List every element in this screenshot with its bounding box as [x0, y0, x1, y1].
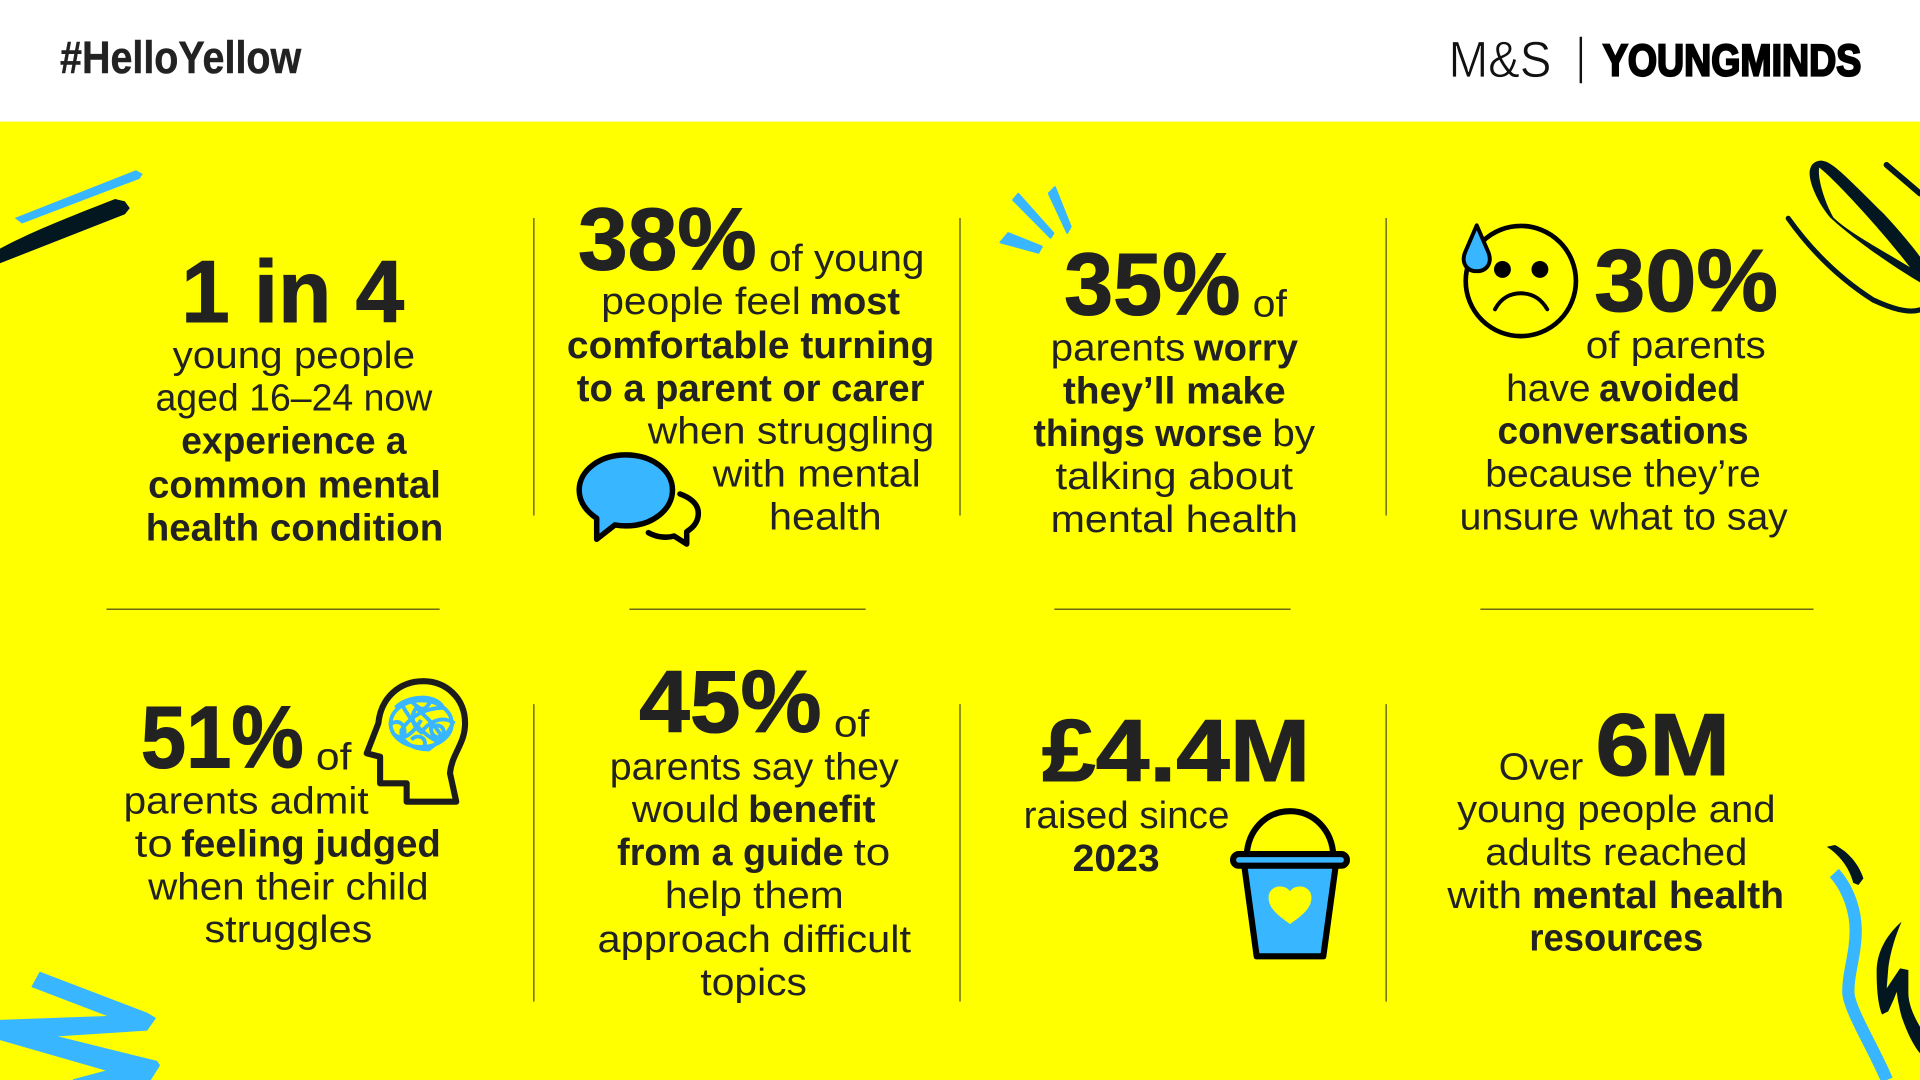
icon: head with tangled brain: [367, 681, 465, 802]
stat: 6M: young people and: [1457, 789, 1776, 831]
stat: 38%: most: [809, 281, 900, 323]
stat: 1 in 4: common mental: [148, 465, 441, 507]
stat: 38%: with mental: [712, 454, 921, 496]
stat: 45%: help them: [665, 875, 844, 917]
stat: 38%: 38%: [578, 189, 757, 288]
stat: 51%: feeling judged: [181, 823, 441, 865]
stat: 1 in 4: aged 16–24 now: [156, 378, 433, 420]
decoration: top-left strokes: [0, 170, 143, 263]
logo: YoungMinds: YOUNGMINDS: [1603, 36, 1861, 85]
stat: 51%: [124, 688, 441, 951]
stat: 45%: topics: [700, 962, 807, 1004]
stat: 6M: 6M: [1596, 695, 1730, 794]
stat: 51%: 51%: [141, 688, 304, 787]
stat: 38%: people feel: [601, 281, 801, 323]
stat: 6M: resources: [1529, 918, 1703, 960]
stat: 45%: to: [853, 832, 890, 874]
stat: 30%: have: [1506, 368, 1591, 410]
stat: 38%: when struggling: [647, 411, 934, 453]
stat: 51%: when their child: [147, 866, 429, 908]
decoration: bottom-left zigzag: [0, 973, 159, 1080]
stat: 6M: adults reached: [1485, 832, 1747, 874]
stat: 45%: [598, 652, 912, 1004]
stat: 35%: things worse: [1033, 413, 1262, 455]
stat: 35%: talking about: [1056, 456, 1294, 498]
stat: 6M: with: [1446, 875, 1522, 917]
stat: 30%: conversations: [1498, 411, 1749, 453]
stat: 51%: struggles: [204, 909, 372, 951]
stat: 30%: [1460, 231, 1788, 538]
stat: 6M: [1446, 695, 1784, 960]
stat: 30%: of parents: [1586, 325, 1766, 367]
stat: 38%: health: [769, 496, 882, 538]
stat: 30%: unsure what to say: [1460, 496, 1788, 538]
stat: £4.4M: [1024, 701, 1310, 880]
stat: 45%: of: [834, 703, 870, 745]
stat: £4.4M: raised since: [1024, 795, 1229, 837]
stat: 1 in 4: experience a: [181, 421, 407, 463]
decoration: top-right scribble: [1788, 161, 1920, 311]
stat: 30%: 30%: [1594, 231, 1778, 330]
stat: 35%: worry: [1193, 327, 1298, 369]
stat: 45%: would: [631, 789, 740, 831]
logo: M&S: M&S: [1449, 30, 1551, 88]
stat: 30%: because they’re: [1485, 454, 1761, 496]
stat: 51%: parents admit: [124, 781, 369, 823]
stat: 45%: 45%: [639, 652, 822, 751]
stat: 35%: by: [1272, 413, 1315, 455]
stat: 38%: to a parent or carer: [577, 368, 925, 410]
stat: 51%: to: [135, 823, 173, 865]
stat: 6M: mental health: [1532, 875, 1784, 917]
stat: 38%: [567, 189, 934, 538]
stat: 35%: of: [1253, 283, 1287, 325]
stat: 45%: from a guide: [617, 832, 844, 874]
decoration: bottom-right squiggles: [1827, 845, 1920, 1080]
stat: 35%: parents: [1051, 327, 1185, 369]
stat: 38%: of young: [769, 238, 924, 280]
stat: 1 in 4: health condition: [146, 507, 443, 549]
icon: sad face with sweat drop: [1464, 225, 1576, 336]
icon: donation bucket with heart: [1233, 811, 1347, 956]
stat: 1 in 4: [146, 242, 443, 549]
stat: £4.4M: £4.4M: [1042, 701, 1310, 800]
stat: £4.4M: 2023: [1073, 838, 1160, 880]
icon: speech bubbles: [579, 455, 698, 544]
stat: 35%: mental health: [1051, 499, 1298, 541]
stat: 1 in 4: young people: [173, 335, 415, 377]
stat: 35%: they’ll make: [1063, 370, 1286, 412]
stat: 45%: benefit: [748, 789, 876, 831]
stat: 30%: avoided: [1599, 368, 1740, 410]
stat: 38%: comfortable turning: [567, 325, 934, 367]
stat: 1 in 4: 1 in 4: [181, 242, 404, 341]
header bar: [0, 0, 1920, 122]
stat: 45%: parents say they: [610, 746, 899, 788]
title hashtag: #HelloYellow: [60, 32, 302, 83]
stat: 35%: 35%: [1064, 235, 1240, 334]
stat: 35%: [1033, 235, 1315, 541]
stat: 45%: approach difficult: [598, 919, 912, 961]
stat: 51%: of: [316, 736, 352, 778]
decoration: burst lines: [1001, 187, 1071, 253]
stat: 6M: Over: [1499, 746, 1583, 788]
